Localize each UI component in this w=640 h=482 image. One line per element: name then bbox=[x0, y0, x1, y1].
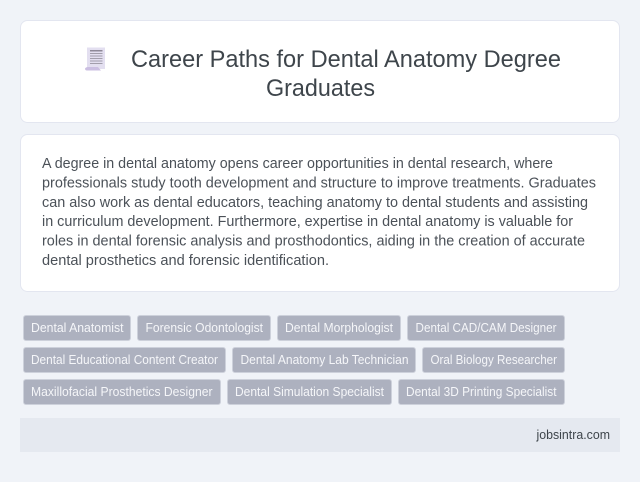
tag: Dental 3D Printing Specialist: Dental 3D Printing Specialist bbox=[406, 385, 557, 399]
title: Career Paths for Dental Anatomy Degree bbox=[131, 46, 561, 73]
footer bar bbox=[20, 418, 620, 452]
panel: description card bbox=[20, 134, 620, 292]
text block: description: A degree in dental anatomy opens career opportunities in dental research, where bbox=[42, 156, 553, 172]
icon: scroll document bbox=[85, 48, 105, 70]
text block: description: dental prosthetics and forensic identification. bbox=[42, 253, 329, 269]
tag: Forensic Odontologist bbox=[138, 316, 270, 340]
title bbox=[131, 46, 561, 102]
tag list: career paths bbox=[24, 316, 564, 404]
tag: Dental CAD/CAM Designer: Dental CAD/CAM Designer bbox=[416, 321, 556, 335]
footer source text: jobsintra.com bbox=[536, 428, 610, 442]
tag: Dental Educational Content Creator bbox=[24, 348, 226, 372]
tag: Dental Educational Content Creator: Dental Educational Content Creator bbox=[31, 353, 218, 367]
text block: description: roles in dental forensic analysis and prosthodontics, aiding in the creation of accurate bbox=[42, 234, 585, 250]
tag: Maxillofacial Prosthetics Designer bbox=[24, 380, 220, 404]
tag: Dental Morphologist bbox=[278, 316, 400, 340]
text block: description: in curriculum development. Furthermore, expertise in dental anatomy is valuable for bbox=[42, 214, 573, 230]
text block: description: can also work as dental educators, teaching anatomy to dental students and assisting bbox=[42, 195, 588, 211]
tag: Dental Anatomy Lab Technician bbox=[232, 348, 416, 372]
tag: Dental Anatomist: Dental Anatomist bbox=[31, 321, 124, 335]
tag: Dental Simulation Specialist: Dental Simulation Specialist bbox=[235, 385, 384, 399]
panel: header card bbox=[20, 20, 620, 122]
tag: Dental 3D Printing Specialist bbox=[398, 380, 564, 404]
title: Graduates bbox=[266, 75, 375, 102]
tag: Oral Biology Researcher: Oral Biology Researcher bbox=[430, 353, 557, 367]
tag: Maxillofacial Prosthetics Designer: Maxillofacial Prosthetics Designer bbox=[31, 385, 212, 399]
tag: Forensic Odontologist: Forensic Odontologist bbox=[146, 321, 263, 335]
tag: Dental Simulation Specialist bbox=[228, 380, 392, 404]
tag: Dental Morphologist: Dental Morphologist bbox=[285, 321, 393, 335]
tag: Dental Anatomy Lab Technician: Dental Anatomy Lab Technician bbox=[240, 353, 408, 367]
tag: Dental Anatomist bbox=[24, 316, 130, 340]
text block: description: professionals study tooth development and structure to improve treatments. Graduates bbox=[42, 176, 596, 192]
tag: Dental CAD/CAM Designer bbox=[408, 316, 564, 340]
text block: description bbox=[42, 156, 596, 269]
tag: Oral Biology Researcher bbox=[422, 348, 564, 372]
